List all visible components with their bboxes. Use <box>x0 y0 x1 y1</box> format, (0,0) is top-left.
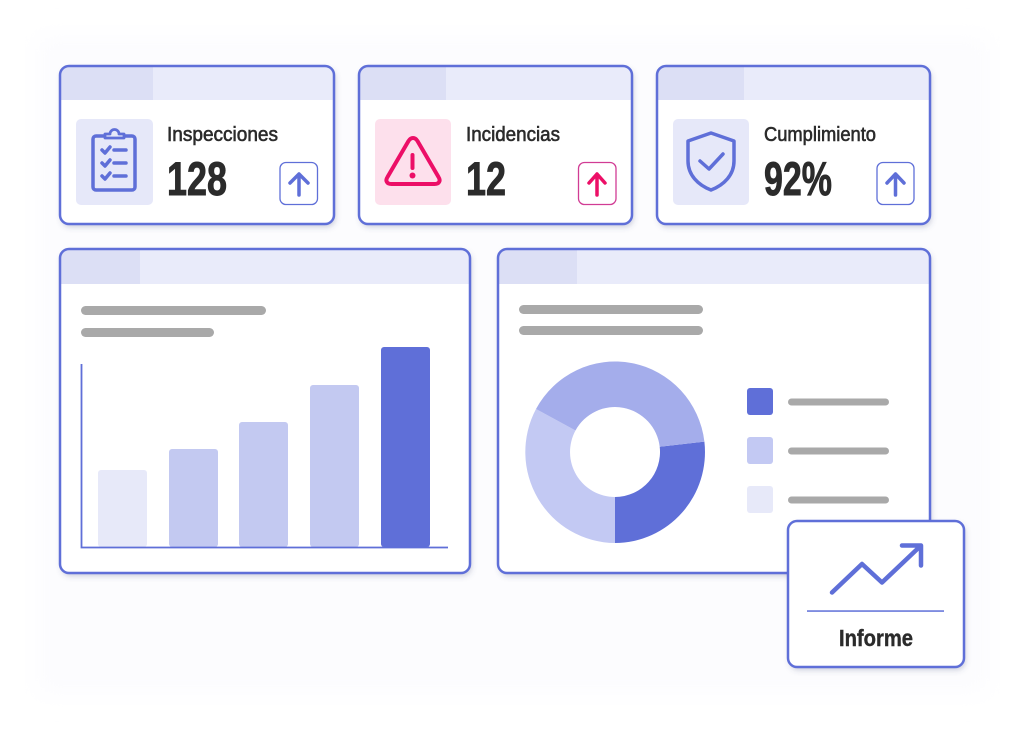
icon: up arrow pink <box>578 162 616 204</box>
value: 92%: 92% <box>764 152 832 205</box>
value: 128: 128 <box>167 152 227 205</box>
icon: up arrow <box>877 162 914 204</box>
placeholder heading lines <box>519 305 703 335</box>
icon: clipboard checklist <box>76 119 153 205</box>
bar chart <box>82 347 448 548</box>
icon: shield check <box>673 119 749 205</box>
legend <box>747 388 889 513</box>
panel: Informe card <box>788 521 964 667</box>
label: Cumplimiento: Cumplimiento <box>764 124 876 146</box>
placeholder heading lines <box>81 306 266 337</box>
label: Inspecciones: Inspecciones <box>167 124 278 146</box>
divider line <box>807 610 944 612</box>
panel: Cumplimiento card <box>657 66 930 224</box>
panel: bar chart <box>60 249 470 573</box>
donut chart <box>525 362 705 543</box>
value: 12: 12 <box>466 152 506 205</box>
panel: Inspecciones card <box>60 66 334 224</box>
icon: trend arrow <box>832 546 921 592</box>
icon: warning triangle <box>375 119 451 205</box>
panel: Incidencias card <box>359 66 632 224</box>
label: Informe: Informe <box>839 625 913 651</box>
label: Incidencias: Incidencias <box>466 124 560 146</box>
icon: up arrow <box>280 162 318 204</box>
panel: donut chart <box>498 249 930 573</box>
